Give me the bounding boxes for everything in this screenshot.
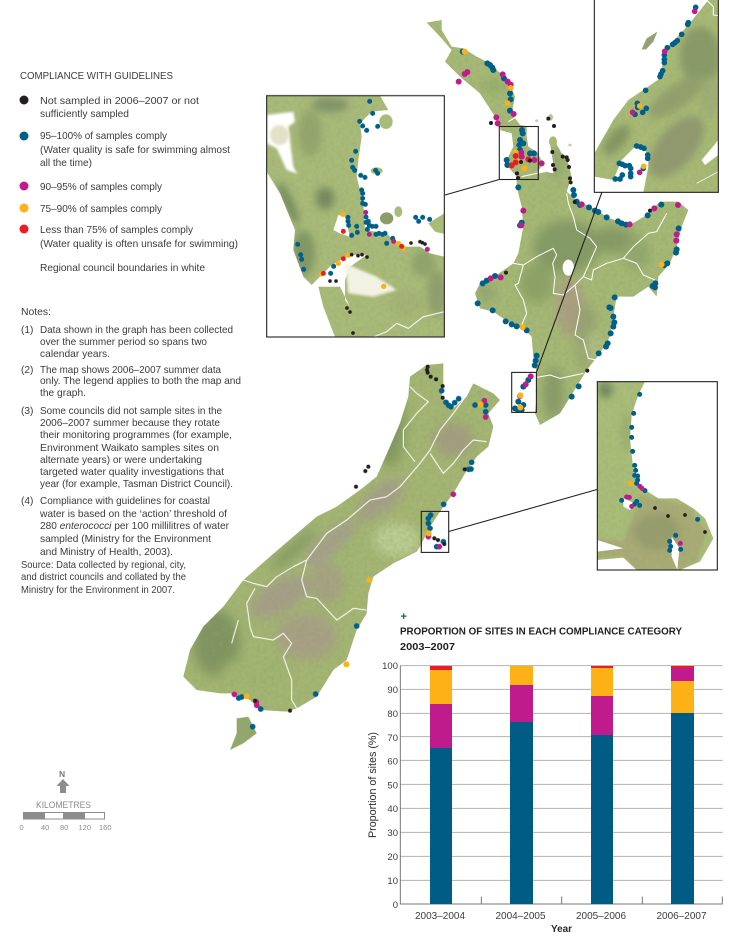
note 4: (4) <box>21 496 33 507</box>
map: Stewart Island <box>230 717 257 750</box>
x-axis tick labels <box>415 911 707 922</box>
legend item: 95–100%: 95–100% of samples comply <box>40 131 168 142</box>
bar 2003–2004 <box>430 666 452 904</box>
note 2 <box>21 365 241 399</box>
bar 2005–2006 <box>591 666 613 904</box>
locator: Banks Peninsula box and leader line <box>421 490 597 552</box>
note 3: Some councils did not sample sites in the <box>40 406 222 417</box>
inset dots: Auckland <box>298 101 430 333</box>
map: South Island <box>180 360 503 750</box>
scale numbers: 80 <box>60 823 68 832</box>
y-axis tick labels: 0 <box>393 900 398 911</box>
note 2: only. The legend applies to both the map and <box>40 376 241 387</box>
note 4: 280 enterococci per 100 millilitres of water <box>40 521 230 532</box>
note 3: year (for example, Tasman District Council). <box>40 479 233 490</box>
bar 2006–2007 <box>671 666 694 904</box>
chart title <box>400 626 682 653</box>
regional boundaries: South Island <box>232 387 487 708</box>
chart title: 2003–2007 <box>400 642 455 653</box>
legend item: not sampled <box>20 96 199 120</box>
note 2: the graph. <box>40 388 86 399</box>
map dots: South Island <box>234 367 486 727</box>
scale numbers: 0 <box>20 823 24 832</box>
note 1: (1) <box>21 325 33 336</box>
notes heading: Notes: <box>21 307 51 318</box>
inset map: Auckland <box>267 96 446 337</box>
inset dots: Banks Peninsula <box>622 394 705 550</box>
locator: Wellington box and leader line <box>512 192 602 412</box>
note 4 <box>21 496 230 558</box>
legend item: not sampled: Not sampled in 2006–2007 or not <box>40 96 199 107</box>
note 1: Data shown in the graph has been collected <box>40 325 233 336</box>
note 2: (2) <box>21 365 33 376</box>
note 3: 2006–2007 summer because they rotate <box>40 418 220 429</box>
legend item: less than 75% <box>20 224 238 250</box>
y-axis tick labels <box>382 661 398 911</box>
y-axis tick labels: 40 <box>387 804 398 815</box>
north arrow: N <box>59 769 65 779</box>
y-axis tick labels: 100 <box>382 661 398 672</box>
scale bar and north arrow <box>20 769 112 832</box>
legend item: 95–100%: all the time) <box>40 158 92 169</box>
legend heading: COMPLIANCE WITH GUIDELINES <box>20 71 173 82</box>
scale numbers: 120 <box>78 823 91 832</box>
scale label: KILOMETRES <box>36 800 91 810</box>
x-axis tick labels: 2006–2007 <box>656 911 707 922</box>
chart: proportion of sites in each compliance category <box>367 611 723 935</box>
note 3: targeted water quality investigations that <box>40 467 224 478</box>
y-axis tick labels: 20 <box>387 852 398 863</box>
y-axis tick labels: 80 <box>387 709 398 720</box>
map: North Island <box>423 17 693 430</box>
note 3: their monitoring programmes (for example, <box>40 430 232 441</box>
note 1 <box>21 325 233 360</box>
legend: compliance with guidelines <box>20 71 238 274</box>
source note: Ministry for the Environment in 2007. <box>21 585 175 596</box>
x-axis tick labels: 2003–2004 <box>415 911 465 922</box>
y-axis tick labels: 10 <box>387 876 398 887</box>
x-axis title: Year <box>551 924 572 935</box>
regional boundaries: North Island <box>508 117 667 378</box>
note 3: (3) <box>21 406 33 417</box>
legend item: not sampled: sufficiently sampled <box>40 109 129 120</box>
scale numbers: 160 <box>99 823 112 832</box>
y-axis tick labels: 30 <box>387 828 398 839</box>
chart plus marker: + <box>400 611 407 623</box>
chart gridlines and axes <box>400 666 723 904</box>
legend item: less than 75%: Less than 75% of samples comply <box>40 225 194 236</box>
note 4: and Ministry of Health, 2003). <box>40 547 173 558</box>
note 4: sampled (Ministry for the Environment <box>40 534 211 545</box>
inset dots: Wellington <box>615 7 696 179</box>
y-axis title: Proportion of sites (%) <box>367 732 379 838</box>
y-axis tick labels: 50 <box>387 780 398 792</box>
x-axis tick labels: 2005–2006 <box>576 911 626 922</box>
note 4: Compliance with guidelines for coastal <box>40 496 210 507</box>
map dots: North Island <box>459 52 679 410</box>
scale numbers <box>20 823 112 832</box>
inset map: Wellington and Kapiti coast <box>594 0 720 192</box>
locator: Auckland box and leader line <box>445 126 538 195</box>
inset map: Banks Peninsula <box>597 382 717 570</box>
scale bar <box>23 812 104 820</box>
note 3: Environment Waikato samples sites on <box>40 443 219 454</box>
legend item: 75–90%: 75–90% of samples comply <box>40 204 163 215</box>
note 1: over the summer period so spans two <box>40 337 207 348</box>
bar 2004–2005 <box>510 666 533 904</box>
note 4: water is based on the ‘action’ threshold of <box>39 509 227 520</box>
legend item: less than 75%: (Water quality is often unsafe for swimming) <box>40 239 238 250</box>
scale numbers: 40 <box>41 823 49 832</box>
note 2: The map shows 2006–2007 summer data <box>40 365 221 376</box>
x-axis tick labels: 2004–2005 <box>496 911 546 922</box>
legend item: 95–100% <box>20 131 230 169</box>
y-axis tick labels: 60 <box>387 756 398 768</box>
source note <box>21 560 186 596</box>
source note: and district councils and collated by the <box>21 572 186 583</box>
legend item: 95–100%: (Water quality is safe for swimming almost <box>40 145 230 156</box>
notes <box>21 307 241 596</box>
y-axis tick labels: 90 <box>387 685 398 696</box>
note 1: calendar years. <box>40 349 110 360</box>
legend note: regional boundaries: Regional council boundaries in white <box>40 263 205 274</box>
note 3 <box>21 406 233 490</box>
stacked bars <box>430 666 694 904</box>
chart title: PROPORTION OF SITES IN EACH COMPLIANCE CATEGORY <box>400 626 682 638</box>
y-axis tick labels: 70 <box>387 733 398 744</box>
legend item: 90–95%: 90–95% of samples comply <box>40 182 163 193</box>
note 3: alternate years) or were undertaking <box>40 455 202 466</box>
source note: Source: Data collected by regional, city, <box>21 560 186 571</box>
